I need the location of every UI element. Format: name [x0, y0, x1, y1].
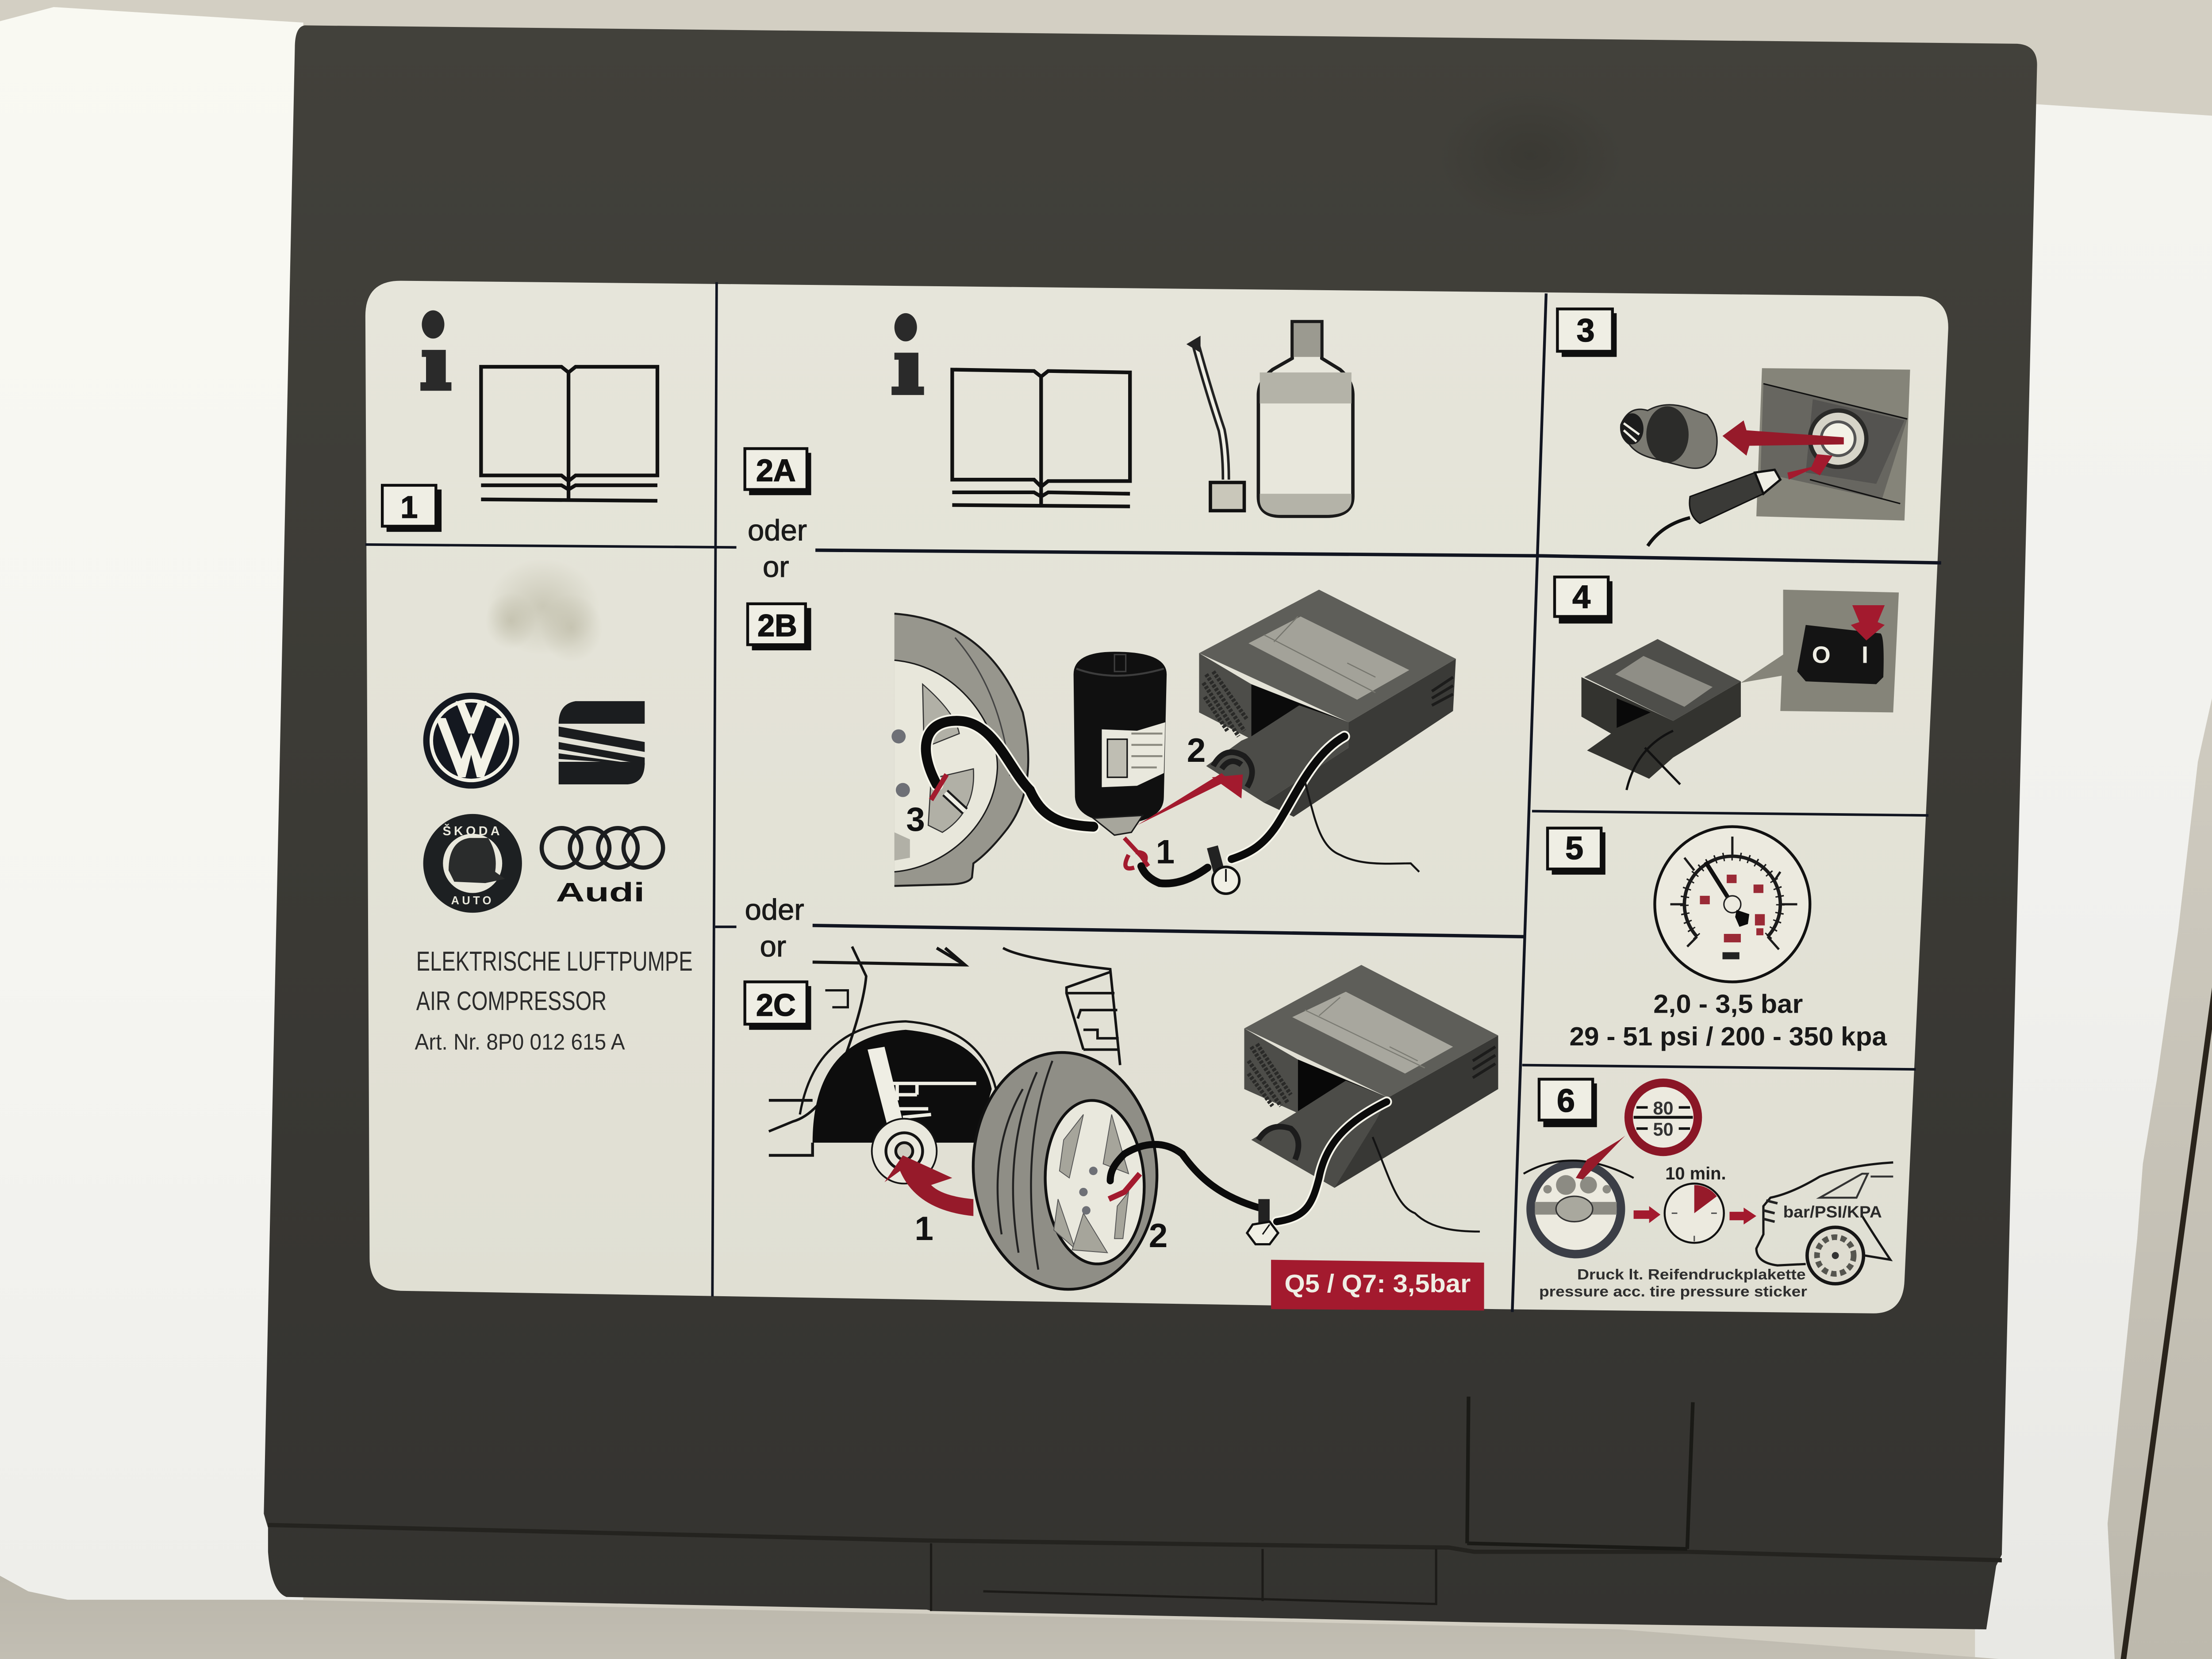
logo: VW	[423, 693, 519, 789]
red arrow 1	[1634, 1206, 1660, 1223]
instruction label	[365, 281, 1948, 1313]
needle	[1705, 862, 1729, 900]
product text: Art. Nr. 8P0 012 615 A	[415, 1029, 625, 1054]
icon: filler hose	[1187, 336, 1244, 511]
valve red marker	[1109, 1174, 1140, 1199]
red arrow onto hub	[884, 1156, 973, 1216]
red arrow to compressor outlet	[1137, 773, 1243, 825]
sticker note text: Druck lt. Reifendruckplakette	[1577, 1267, 1806, 1283]
panel 1 lower: brand logos and product text	[415, 693, 693, 1054]
plug with cable	[1647, 470, 1780, 546]
sealant hose to wheel	[926, 721, 1093, 827]
badge 1	[382, 485, 442, 532]
logo: Skoda: AUTO	[451, 895, 494, 907]
badge 4	[1555, 577, 1613, 623]
red pointer	[1576, 1136, 1625, 1179]
panel 5: pressure reading	[1548, 827, 1887, 1051]
car body outline	[769, 947, 1120, 1156]
compressor small	[1582, 639, 1741, 790]
power cable	[1373, 1137, 1480, 1232]
label sheet	[365, 281, 1948, 1313]
switch inset	[1741, 590, 1899, 712]
wheel rim	[891, 660, 998, 872]
separator text: oder or: or	[763, 550, 789, 584]
product text: ELEKTRISCHE LUFTPUMPE	[416, 946, 693, 977]
pressure text	[1570, 990, 1887, 1051]
number 2: 2	[1187, 732, 1206, 769]
panel 3: 12V socket	[1557, 309, 1910, 546]
red arrow: cap out	[1722, 420, 1844, 456]
separator text: oder or: oder	[745, 893, 804, 926]
gauge dial	[1655, 827, 1810, 982]
panel 1: read manual	[382, 311, 657, 532]
red arrow down	[1851, 605, 1885, 641]
case bottom latch	[931, 1544, 1436, 1611]
rocker switch: I	[1862, 642, 1868, 668]
compressor hose	[1141, 737, 1344, 883]
spring	[891, 1083, 976, 1118]
icon: information i	[420, 311, 451, 391]
pressure gauge	[1207, 845, 1239, 894]
red connection marker	[1124, 838, 1148, 868]
panel 4: switch on	[1555, 577, 1899, 790]
sealant canister	[1074, 652, 1167, 824]
gauge marks red	[1700, 875, 1765, 942]
badge 5	[1548, 828, 1605, 875]
background: stone bottom	[0, 1576, 1999, 1659]
background: stone lower right	[2108, 698, 2212, 1659]
badge 2B	[748, 604, 811, 650]
separator text: oder or	[745, 893, 804, 963]
suspension strut	[868, 1047, 903, 1126]
duration text: 10 min.	[1665, 1164, 1726, 1183]
badge 3	[1557, 309, 1617, 357]
rocker switch: O	[1812, 642, 1831, 668]
compressor	[1244, 965, 1498, 1188]
red arrow: plug in	[1787, 454, 1832, 480]
steering wheel	[1524, 1160, 1634, 1254]
panel 2A: manual and sealant bottle	[745, 313, 1353, 516]
label stain	[485, 559, 603, 662]
case handle slot	[1467, 1397, 1693, 1549]
logo: Skoda: ŠKODA	[442, 823, 503, 838]
divider lines	[365, 282, 1941, 1312]
logo: SEAT	[559, 701, 645, 784]
socket inset	[1756, 368, 1910, 521]
badge 2A	[745, 449, 811, 495]
icon: open book	[481, 367, 657, 501]
socket cap	[1621, 405, 1717, 468]
badge 2C: 2C	[756, 987, 796, 1022]
case bottom seam	[268, 1525, 2002, 1560]
speed sign	[1628, 1083, 1698, 1152]
badge 5: 5	[1565, 830, 1583, 866]
badge 3: 3	[1577, 312, 1595, 349]
clock	[1665, 1183, 1724, 1243]
air hose	[1110, 1102, 1387, 1221]
wheel tyre	[895, 614, 1028, 886]
logo: Audi rings: Audi	[556, 877, 645, 907]
background: cable lower right	[2123, 987, 2212, 1659]
compressor	[1199, 590, 1456, 817]
compressor case	[264, 25, 2037, 1629]
number 1: 1	[914, 1210, 933, 1248]
badge 2B: 2B	[757, 608, 797, 643]
canister nozzle	[1093, 815, 1143, 835]
panel 2C: spare wheel fit	[745, 947, 1498, 1310]
power cable	[1305, 782, 1419, 872]
separator text: oder or	[748, 514, 807, 584]
car rear	[1756, 1163, 1893, 1284]
pressure text: 2,0 - 3,5 bar	[1653, 990, 1803, 1019]
hub	[872, 1119, 937, 1183]
background: white paper right	[1975, 100, 2212, 1659]
badge 2C	[745, 982, 811, 1030]
icon: sealant bottle	[1258, 322, 1353, 516]
sticker note text	[1539, 1267, 1807, 1300]
number 1: 1	[1156, 833, 1175, 871]
callout: Q5 / Q7 pressure	[1271, 1260, 1484, 1310]
speed sign: 50	[1653, 1119, 1674, 1140]
number 3: 3	[906, 801, 925, 838]
pressure text: 29 - 51 psi / 200 - 350 kpa	[1570, 1022, 1887, 1051]
rocker switch	[1797, 625, 1884, 684]
spare wheel	[965, 1046, 1165, 1295]
sticker note text: pressure acc. tire pressure sticker	[1539, 1283, 1807, 1300]
product text	[415, 946, 693, 1054]
pressure gauge	[1247, 1199, 1278, 1244]
wheel arch	[800, 1022, 996, 1183]
logo: Audi rings	[541, 828, 663, 907]
valve connector	[945, 793, 965, 811]
badge 2A: 2A	[756, 453, 796, 488]
icon: open book	[952, 369, 1130, 507]
car pressure text: bar/PSI/KPA	[1783, 1203, 1882, 1221]
badge 4: 4	[1572, 579, 1590, 615]
badge 1: 1	[400, 489, 418, 524]
number 2: 2	[1149, 1217, 1167, 1255]
separator text: oder or: oder	[748, 514, 807, 547]
product text: AIR COMPRESSOR	[416, 986, 607, 1016]
case body	[264, 25, 2037, 1629]
separator text: oder or: or	[760, 930, 786, 963]
panel 2B: bottle connection to wheel	[748, 590, 1456, 894]
badge 6	[1539, 1079, 1597, 1127]
red arrow 2	[1729, 1208, 1756, 1225]
speed sign: 80	[1653, 1098, 1674, 1118]
panel 6: drive and recheck	[1524, 1079, 1893, 1300]
badge 6: 6	[1557, 1083, 1575, 1119]
valve marker red	[931, 775, 947, 800]
background: white paper left	[0, 7, 303, 1600]
case smudge	[1439, 88, 1622, 223]
icon: information i	[891, 313, 924, 395]
callout: Q5 / Q7 pressure: Q5 / Q7: 3,5bar	[1284, 1270, 1471, 1298]
logo: Skoda	[423, 814, 522, 913]
